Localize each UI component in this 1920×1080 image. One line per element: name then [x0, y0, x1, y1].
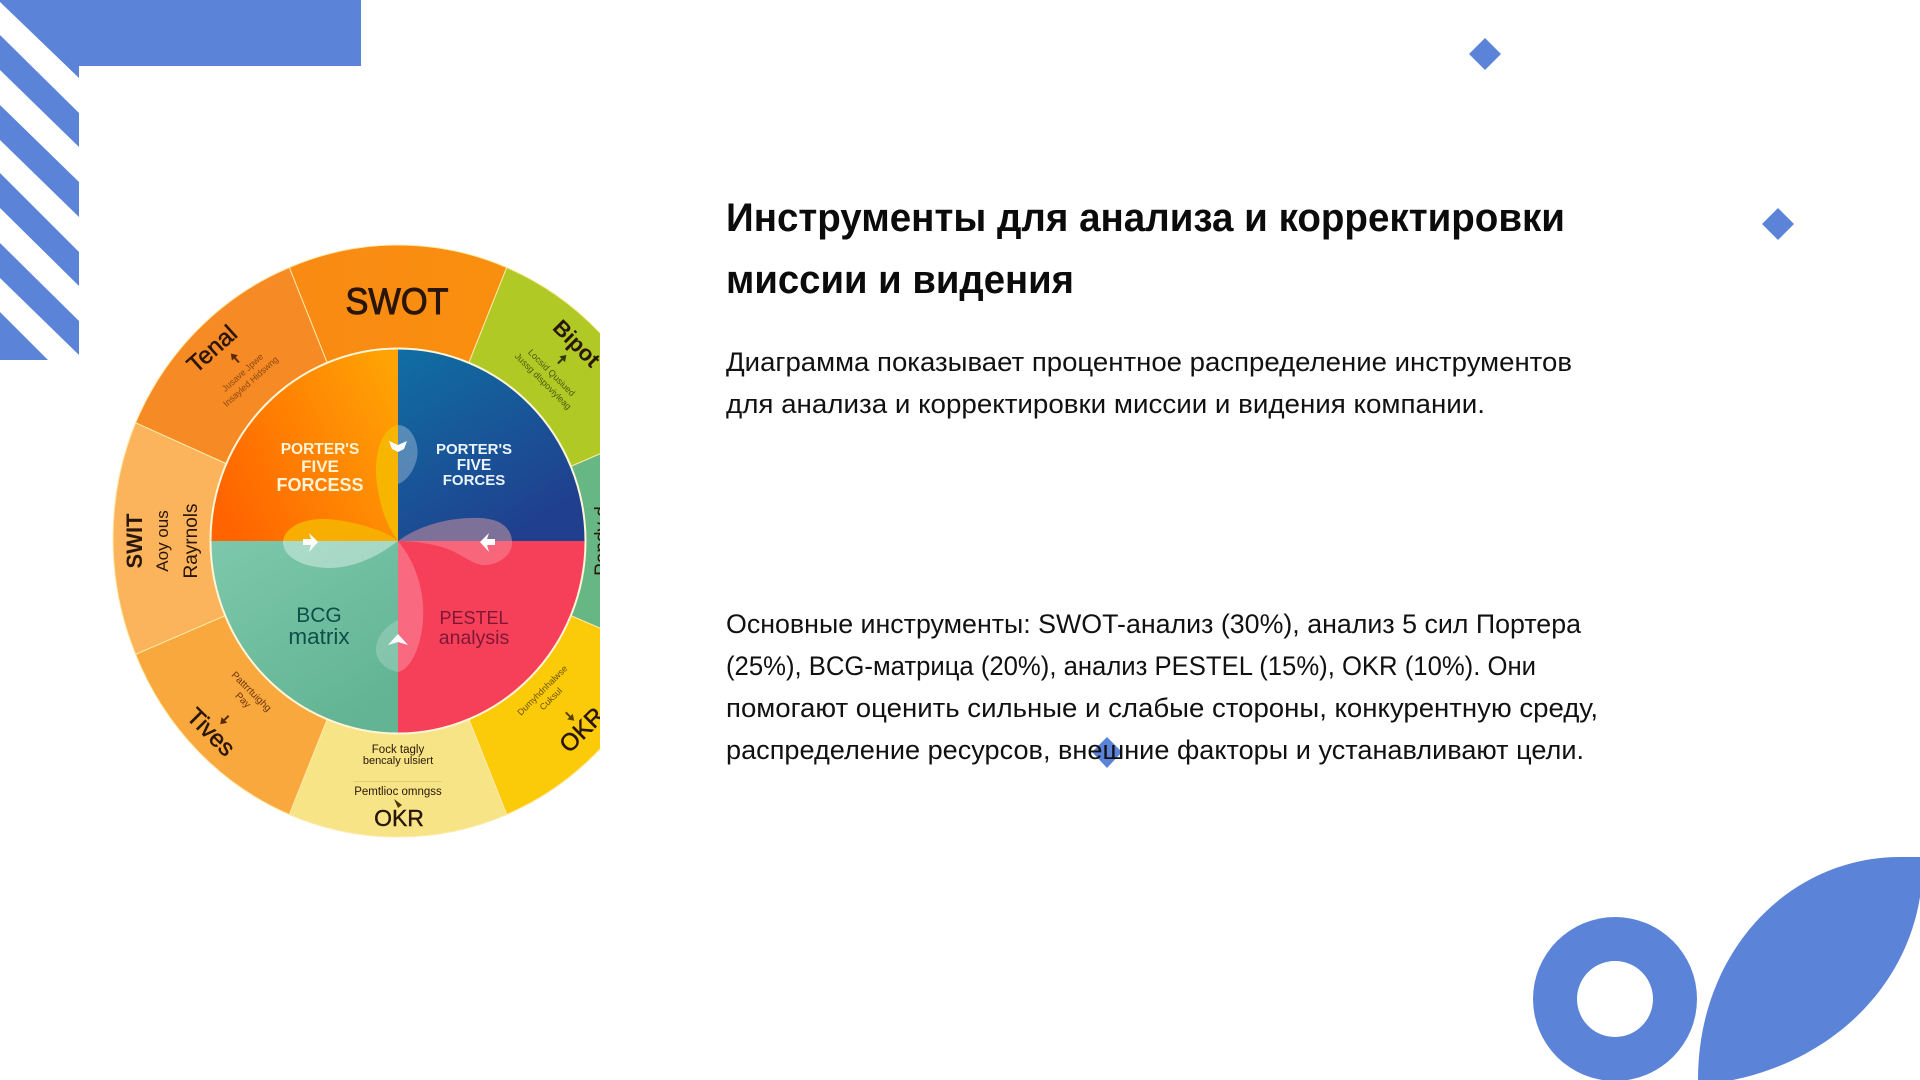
- outer labels: Bipot: [548, 315, 606, 373]
- text block: description: Диаграмма показывает процентное распределение инструментов: [726, 347, 1572, 377]
- outer labels: Dumyhdnhalwse: [515, 663, 569, 717]
- outer labels: Fock tagly: [372, 744, 424, 756]
- title: Инструменты для анализа и корректировки: [726, 196, 1565, 240]
- text block: main tools: Основные инструменты: SWOT-анализ (30%), анализ 5 сил Портера: [726, 609, 1582, 639]
- top-left corner bar and stripes: [0, 0, 361, 360]
- outer labels: [122, 281, 615, 831]
- text block: description: [726, 347, 1572, 419]
- icon: arrow down: [389, 441, 407, 452]
- outer labels: SWOT: [346, 281, 448, 322]
- outer labels: Pattrrtuighg: [229, 670, 273, 714]
- outer labels: bencaly ulsiert: [363, 755, 433, 767]
- outer labels: Tenal: [182, 320, 243, 379]
- outer labels: Tives: [181, 703, 240, 762]
- outer labels: Cuksul: [538, 686, 564, 712]
- outer labels: Pandy d: [592, 506, 613, 576]
- inner circle quadrants: [210, 348, 586, 734]
- outer labels: Aoy ous: [153, 510, 172, 572]
- outer labels: OKR: [554, 702, 610, 758]
- chart: tools wheel: [112, 244, 600, 838]
- outer ring sectors: [112, 244, 600, 838]
- icon: arrow right: [303, 533, 318, 552]
- text block: main tools: (25%), BCG-матрица (20%), анализ PESTEL (15%), OKR (10%). Они: [726, 651, 1536, 681]
- outer labels: Insayled Hidswng: [221, 354, 280, 409]
- title: миссии и видения: [726, 258, 1074, 302]
- inner labels: BCG: [296, 604, 342, 627]
- icon: diamond behind text: [1092, 737, 1122, 768]
- text block: description: для анализа и корректировки миссии и видения компании.: [726, 389, 1485, 419]
- icon: arrow up: [388, 634, 408, 645]
- icon: diamond top: [1469, 38, 1501, 70]
- decorative leaf: [1698, 857, 1920, 1080]
- icon: arrow left: [480, 533, 495, 552]
- decorative ring: [1533, 917, 1697, 1080]
- text block: main tools: помогают оценить сильные и слабые стороны, конкурентную среду,: [726, 693, 1598, 723]
- outer labels: Rayrnols: [181, 504, 202, 578]
- outer labels: Pemtlioc omngss: [354, 786, 442, 798]
- inner labels: PESTEL: [439, 608, 509, 628]
- icon: diamond right: [1762, 208, 1794, 240]
- text block: main tools: распределение ресурсов, внешние факторы и устанавливают цели.: [726, 735, 1584, 765]
- outer labels: Locsid Qusiued: [526, 347, 577, 398]
- inner labels: FORCESS: [276, 475, 364, 495]
- inner labels: matrix: [288, 624, 350, 649]
- text block: main tools: [726, 609, 1598, 765]
- outer labels: Pay: [232, 691, 252, 711]
- outer labels: SWIT: [122, 513, 147, 568]
- inner labels: FORCES: [443, 472, 505, 489]
- inner labels: analysis: [439, 627, 509, 649]
- inner labels: PORTER'S: [436, 441, 512, 458]
- inner labels: FIVE: [457, 457, 491, 474]
- inner labels: PORTER'S: [281, 441, 359, 458]
- outer labels: Jusave Jpwe: [220, 351, 265, 394]
- inner labels: FIVE: [301, 457, 339, 476]
- inner labels: [276, 441, 512, 649]
- swirl highlights: [283, 425, 512, 672]
- outer labels: Jussg dlspoviyleag: [513, 351, 573, 411]
- outer labels: OKR: [374, 805, 424, 831]
- title: [726, 196, 1565, 302]
